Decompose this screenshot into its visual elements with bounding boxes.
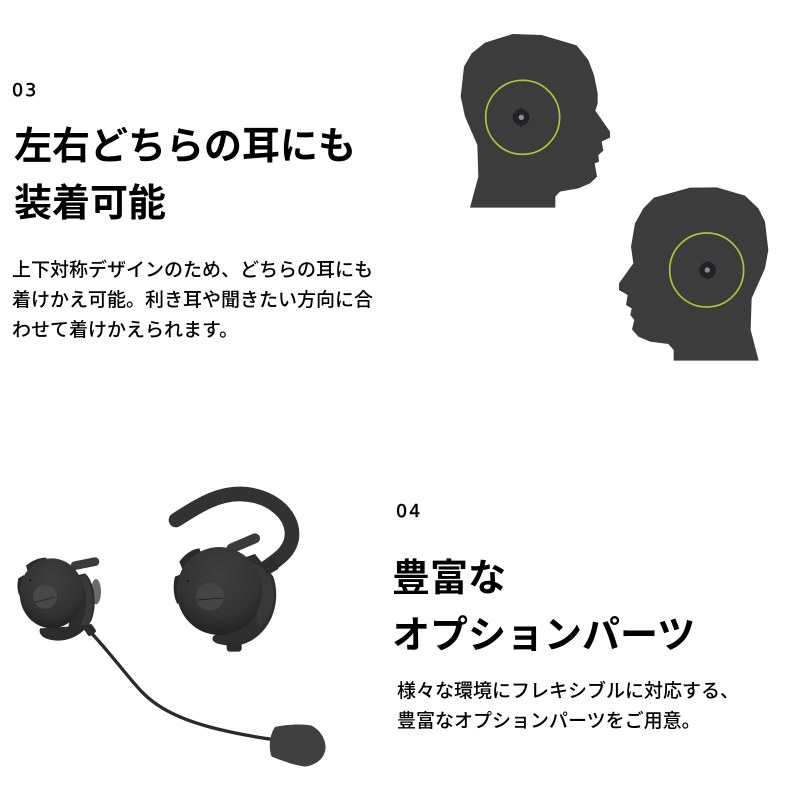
number 03: 03	[12, 81, 38, 101]
body text: symmetrical design	[12, 260, 373, 341]
heading: rich optional parts: オプションパーツ	[392, 615, 695, 657]
heading: rich optional parts	[392, 558, 695, 657]
body text: symmetrical design: わせて着けかえられます。	[12, 320, 238, 341]
heading: rich optional parts: 豊富な	[392, 558, 506, 600]
body text: flexible options: 様々な環境にフレキシブルに対応する、	[397, 681, 739, 702]
microphone foam	[270, 725, 326, 767]
body text: flexible options: 豊富なオプションパーツをご用意。	[397, 711, 701, 732]
body text: symmetrical design: 上下対称デザインのため、どちらの耳にも	[12, 260, 373, 281]
heading: wear on either ear	[14, 126, 356, 225]
body text: symmetrical design: 着けかえ可能。利き耳や聞きたい方向に合	[12, 290, 373, 311]
microphone cable	[92, 633, 272, 739]
number 04: 04	[396, 502, 422, 522]
earbud with boom microphone	[17, 558, 101, 641]
head facing left	[619, 187, 768, 361]
body text: flexible options	[397, 680, 739, 732]
heading: wear on either ear: 装着可能	[14, 183, 166, 225]
head facing right	[461, 34, 610, 208]
earbud with ear hook	[174, 494, 292, 652]
heading: wear on either ear: 左右どちらの耳にも	[14, 126, 356, 168]
